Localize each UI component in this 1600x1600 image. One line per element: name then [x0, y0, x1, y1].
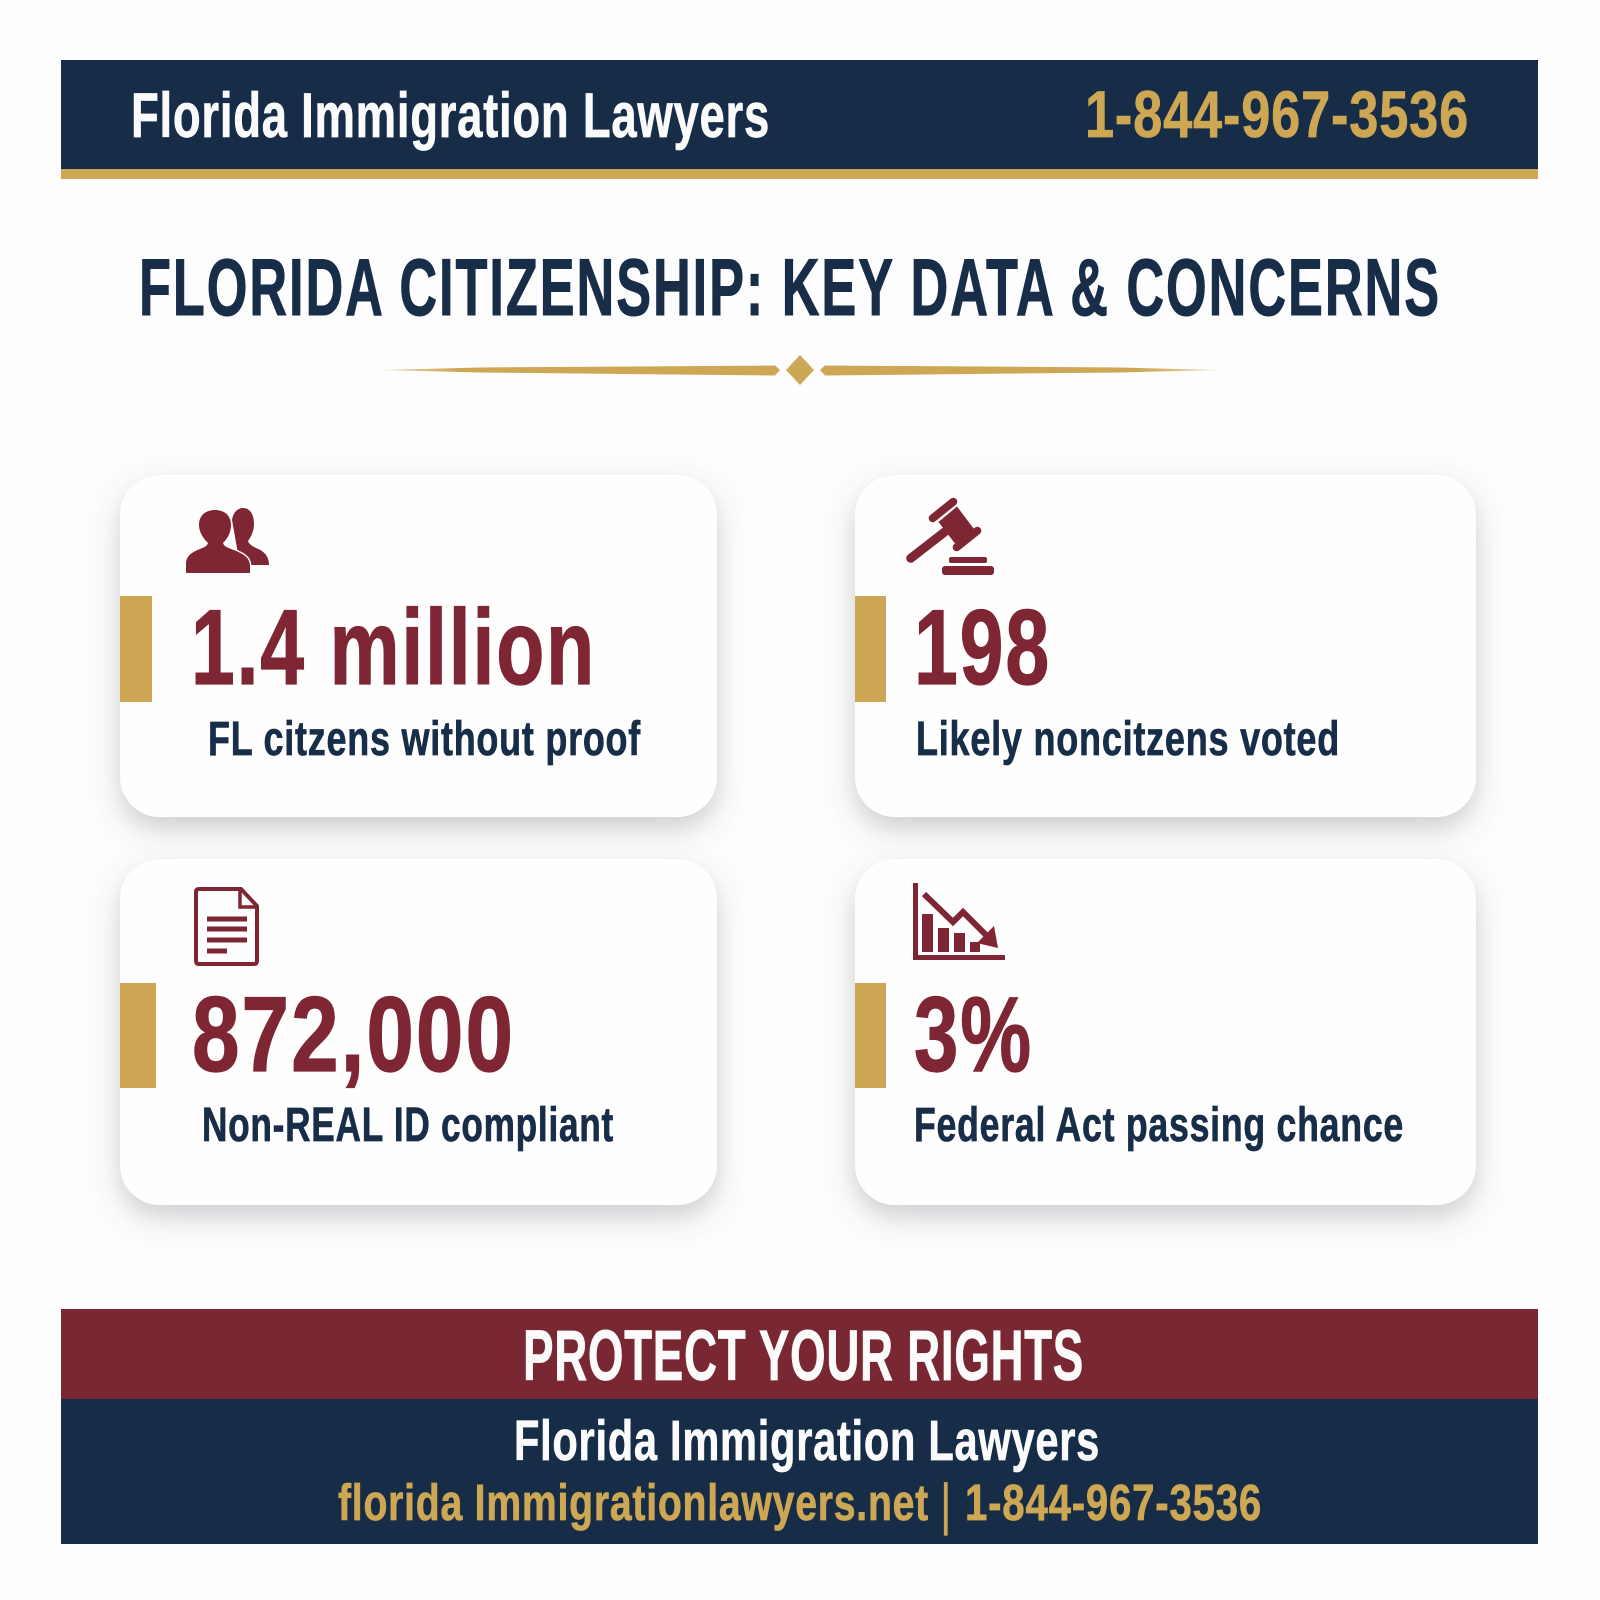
footer: contact band: |	[942, 1472, 950, 1536]
firm name: Florida Immigration Lawyers	[131, 81, 770, 151]
description: Federal Act passing chance	[914, 1099, 1404, 1152]
gold accent bar	[120, 983, 156, 1088]
panel: 3% chance	[855, 859, 1476, 1205]
panel: 872,000 non-compliant	[120, 859, 717, 1205]
gold accent bar	[855, 596, 886, 702]
icon: two people	[186, 508, 269, 573]
big number: 3%	[914, 974, 1033, 1094]
panel: 1.4 million citizens	[120, 475, 717, 817]
title divider	[380, 355, 1218, 385]
panel: 198 noncitizens	[855, 475, 1476, 817]
website: florida Immigrationlawyers.net	[338, 1474, 929, 1531]
big number: 872,000	[192, 974, 515, 1094]
description: FL citzens without proof	[208, 713, 641, 766]
big number: 198	[914, 587, 1051, 707]
firm name: Florida Immigration Lawyers	[514, 1409, 1100, 1473]
gold accent bar	[855, 983, 886, 1088]
phone number: 1-844-967-3536	[1085, 77, 1469, 151]
gold accent bar	[120, 596, 152, 702]
icon: gavel	[911, 502, 994, 575]
footer heading: PROTECT YOUR RIGHTS	[523, 1317, 1084, 1396]
phone number: 1-844-967-3536	[965, 1474, 1262, 1531]
top header banner	[61, 60, 1538, 179]
footer: contact band	[61, 1399, 1538, 1544]
footer: protect your rights band	[61, 1309, 1538, 1399]
icon: document	[196, 889, 257, 964]
description: Non-REAL ID compliant	[202, 1099, 614, 1152]
big number: 1.4 million	[191, 587, 596, 707]
icon: declining chart	[913, 883, 1005, 960]
description: Likely noncitzens voted	[916, 713, 1340, 766]
